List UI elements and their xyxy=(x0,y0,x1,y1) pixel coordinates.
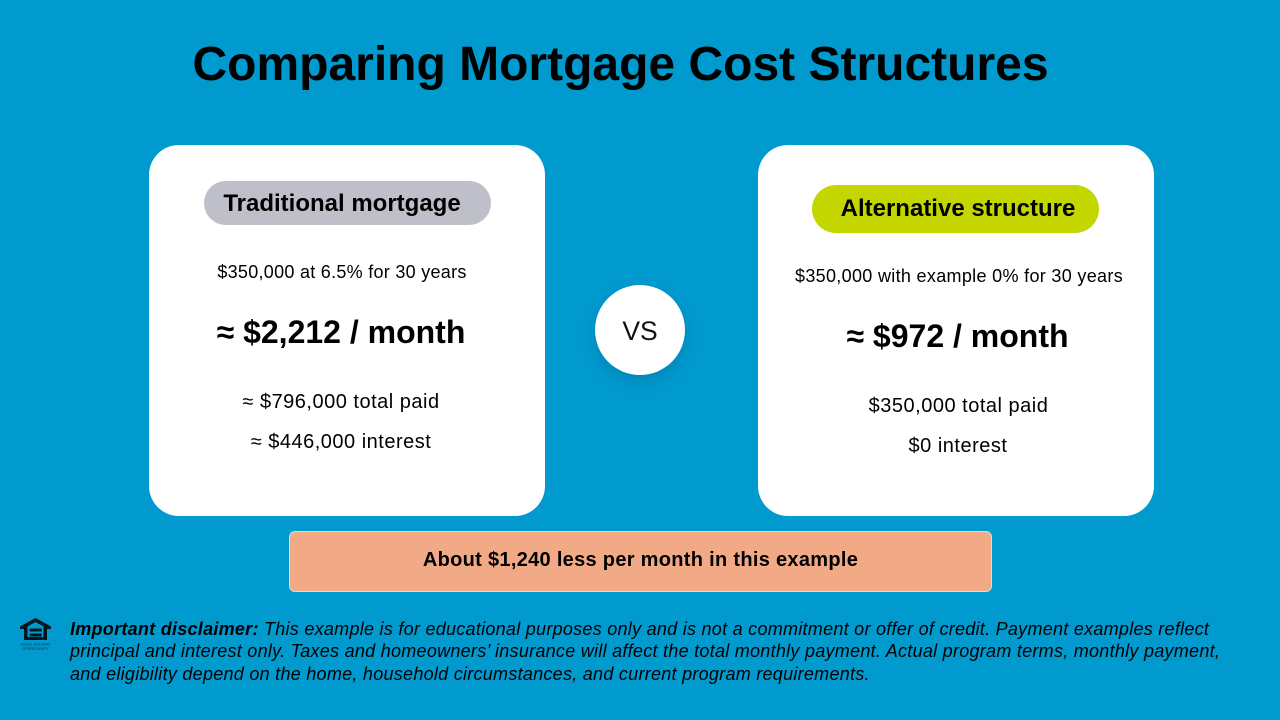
loan terms: $350,000 with example 0% for 30 years xyxy=(795,266,1123,286)
savings callout xyxy=(289,531,992,592)
disclaimer xyxy=(70,618,1220,684)
savings callout: About $1,240 less per month in this example xyxy=(423,549,858,571)
vs label: VS xyxy=(622,316,658,346)
disclaimer: principal and interest only. Taxes and homeowners’ insurance will affect the total monthly payment. Actual program terms, monthly payment, xyxy=(70,641,1220,661)
panel: alternative structure xyxy=(758,145,1154,516)
loan terms: $350,000 at 6.5% for 30 years xyxy=(217,262,467,282)
monthly payment: ≈ $2,212 / month xyxy=(217,314,465,350)
pill: traditional mortgage: Traditional mortgage xyxy=(223,190,461,217)
icon: equal housing opportunity xyxy=(20,618,51,651)
monthly payment: ≈ $972 / month xyxy=(846,318,1069,354)
title: Comparing Mortgage Cost Structures xyxy=(192,38,1049,91)
vs badge xyxy=(595,285,685,375)
icon: equal housing opportunity: OPPORTUNITY xyxy=(23,647,49,651)
panel: traditional mortgage xyxy=(149,145,545,516)
disclaimer: Important disclaimer: This example is for educational purposes only and is not a commitment or offer of credit. Payment examples reflect xyxy=(70,618,1209,638)
pill: alternative structure: Alternative structure xyxy=(841,195,1075,222)
disclaimer: and eligibility depend on the home, household circumstances, and current program requirements. xyxy=(70,664,870,684)
interest: $0 interest xyxy=(909,435,1007,457)
pill: alternative structure xyxy=(812,185,1099,233)
interest: ≈ $446,000 interest xyxy=(251,431,431,453)
pill: traditional mortgage xyxy=(204,181,491,225)
icon: equal housing opportunity: EQUAL HOUSING xyxy=(21,642,51,646)
total paid: $350,000 total paid xyxy=(869,395,1048,417)
total paid: ≈ $796,000 total paid xyxy=(242,391,440,413)
